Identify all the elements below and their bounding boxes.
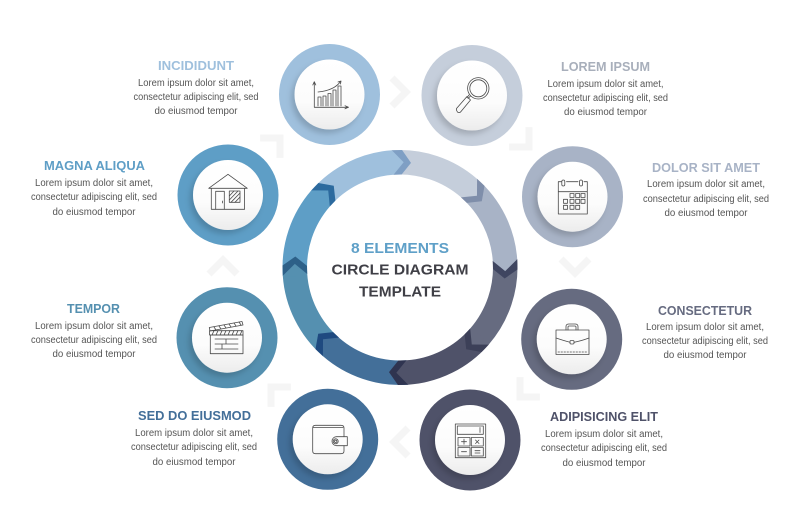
ring: tempor bbox=[176, 287, 278, 388]
heading: tempor: TEMPOR bbox=[67, 302, 120, 316]
body: dolor sit amet bbox=[643, 179, 769, 219]
element: adipisicing elit bbox=[420, 390, 667, 490]
body: consectetur: Lorem ipsum dolor sit amet, bbox=[646, 322, 764, 333]
body: magna aliqua: Lorem ipsum dolor sit amet, bbox=[35, 178, 153, 189]
heading: adipisicing elit: ADIPISICING ELIT bbox=[550, 410, 658, 424]
body: adipisicing elit: consectetur adipiscing elit, sed bbox=[541, 443, 667, 454]
body: tempor bbox=[31, 321, 157, 360]
body: lorem ipsum bbox=[543, 79, 668, 118]
body: consectetur bbox=[642, 322, 768, 361]
element: dolor sit amet bbox=[522, 146, 769, 247]
element: consectetur bbox=[521, 289, 768, 390]
body: adipisicing elit: Lorem ipsum dolor sit amet, bbox=[545, 429, 663, 440]
body: incididunt: do eiusmod tempor bbox=[154, 106, 238, 117]
body: dolor sit amet: do eiusmod tempor bbox=[664, 208, 748, 219]
icon: briefcase bbox=[556, 324, 589, 354]
body: sed do eiusmod: Lorem ipsum dolor sit amet, bbox=[135, 428, 253, 439]
element: tempor bbox=[31, 287, 278, 388]
disc: adipisicing elit bbox=[435, 405, 505, 475]
heading: dolor sit amet: DOLOR SIT AMET bbox=[652, 161, 760, 175]
body: tempor: consectetur adipiscing elit, sed bbox=[31, 335, 157, 346]
body: dolor sit amet: Lorem ipsum dolor sit amet, bbox=[647, 179, 765, 190]
body: adipisicing elit bbox=[541, 429, 667, 469]
ring: adipisicing elit bbox=[420, 390, 520, 490]
icon: house bbox=[209, 174, 247, 209]
ring: sed do eiusmod bbox=[277, 389, 378, 490]
central title: TEMPLATE bbox=[359, 284, 441, 300]
body: lorem ipsum: consectetur adipiscing elit, sed bbox=[543, 93, 668, 104]
body: dolor sit amet: consectetur adipiscing elit, sed bbox=[643, 194, 769, 205]
body: sed do eiusmod: consectetur adipiscing elit, sed bbox=[131, 442, 257, 453]
disc: incididunt bbox=[294, 60, 364, 130]
connector chevrons between circles bbox=[209, 78, 589, 456]
heading: consectetur: CONSECTETUR bbox=[658, 304, 752, 318]
body: incididunt: consectetur adipiscing elit, sed bbox=[134, 92, 258, 103]
body: sed do eiusmod: do eiusmod tempor bbox=[152, 457, 236, 468]
icon: clapperboard bbox=[209, 322, 243, 354]
heading: lorem ipsum: LOREM IPSUM bbox=[561, 60, 650, 74]
ring: magna aliqua bbox=[178, 144, 278, 246]
body: adipisicing elit: do eiusmod tempor bbox=[562, 458, 646, 469]
icon: magnifying glass bbox=[456, 78, 489, 113]
heading: incididunt: INCIDIDUNT bbox=[158, 59, 234, 73]
icon: bar chart bbox=[313, 81, 348, 109]
body: magna aliqua bbox=[31, 178, 157, 218]
disc: sed do eiusmod bbox=[293, 404, 363, 474]
element: magna aliqua bbox=[31, 144, 278, 246]
disc: tempor bbox=[192, 303, 262, 373]
icon: calculator bbox=[455, 424, 486, 458]
ring: lorem ipsum bbox=[422, 45, 522, 146]
body: incididunt: Lorem ipsum dolor sit amet, bbox=[138, 78, 254, 89]
body: incididunt bbox=[134, 78, 258, 117]
central title bbox=[332, 240, 468, 300]
body: sed do eiusmod bbox=[131, 428, 257, 468]
body: tempor: Lorem ipsum dolor sit amet, bbox=[35, 321, 153, 332]
disc: consectetur bbox=[537, 304, 607, 374]
central segmented ring bbox=[262, 130, 538, 405]
icon: calendar bbox=[558, 180, 587, 214]
body: magna aliqua: consectetur adipiscing elit, sed bbox=[31, 192, 157, 203]
body: magna aliqua: do eiusmod tempor bbox=[52, 207, 136, 218]
body: lorem ipsum: Lorem ipsum dolor sit amet, bbox=[548, 79, 664, 90]
ring: incididunt bbox=[279, 44, 380, 145]
central title: CIRCLE DIAGRAM bbox=[332, 262, 468, 278]
element: lorem ipsum bbox=[422, 45, 668, 146]
element: incididunt bbox=[134, 44, 380, 145]
body: lorem ipsum: do eiusmod tempor bbox=[564, 107, 648, 118]
element: sed do eiusmod bbox=[131, 389, 378, 490]
disc: magna aliqua bbox=[193, 160, 263, 230]
ring: consectetur bbox=[521, 289, 622, 390]
ring: dolor sit amet bbox=[522, 146, 623, 247]
icon: wallet bbox=[313, 425, 347, 454]
central title: 8 ELEMENTS bbox=[351, 240, 449, 257]
body: consectetur: do eiusmod tempor bbox=[664, 350, 747, 361]
heading: sed do eiusmod: SED DO EIUSMOD bbox=[138, 409, 251, 423]
body: tempor: do eiusmod tempor bbox=[52, 349, 136, 360]
body: consectetur: consectetur adipiscing elit, sed bbox=[642, 336, 768, 347]
disc: dolor sit amet bbox=[538, 162, 608, 232]
disc: lorem ipsum bbox=[437, 60, 507, 130]
heading: magna aliqua: MAGNA ALIQUA bbox=[44, 159, 145, 173]
